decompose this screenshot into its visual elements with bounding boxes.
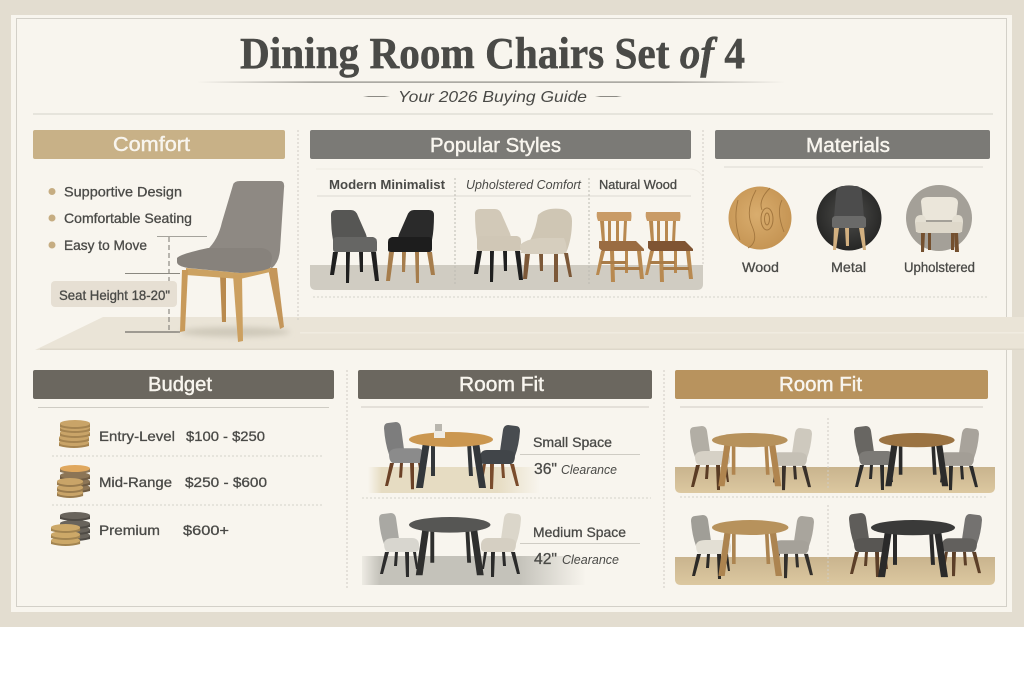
heading: room fit [675, 370, 988, 399]
panel: comfort [33, 130, 290, 342]
heading: room fit [358, 370, 652, 399]
budget row: premium: $600+ [183, 522, 229, 538]
panel: room fit clearance [358, 370, 652, 585]
small space scene [368, 422, 540, 493]
title: Dining Room Chairs Set of 4 [240, 29, 745, 78]
panel: popular styles [310, 130, 703, 290]
budget row: entry-level [59, 420, 265, 448]
heading: comfort: Comfort [113, 134, 190, 156]
scene: oak table with light chairs [690, 426, 812, 490]
budget row: mid-range [57, 465, 267, 498]
style: modern minimalist [329, 177, 446, 283]
title rule [197, 82, 785, 83]
style: upholstered comfort [466, 177, 582, 282]
panel: room fit options [675, 370, 995, 585]
medium space text: Medium Space [533, 524, 626, 540]
wood floor upper [675, 467, 995, 493]
seat height label [51, 281, 177, 307]
comfort list: Easy to Move [64, 237, 147, 253]
heading: budget [33, 370, 334, 399]
medium space text: 42" [534, 551, 557, 568]
scene: black table with dark chairs [849, 513, 982, 577]
budget row: entry-level: Entry-Level [99, 428, 175, 444]
medium space text [520, 524, 640, 568]
material: wood: Wood [742, 259, 779, 275]
style: natural wood [596, 177, 693, 282]
small space text: Clearance [561, 462, 617, 477]
material: metal [816, 186, 882, 275]
small space text [520, 434, 640, 478]
scene: walnut table with grey chairs [854, 426, 979, 490]
budget row: entry-level: $100 - $250 [186, 428, 265, 444]
material: upholstered [904, 185, 975, 275]
heading: room fit: Room Fit [459, 374, 544, 396]
heading: popular styles [310, 130, 691, 159]
comfort list [48, 184, 192, 253]
heading: budget: Budget [148, 374, 212, 396]
heading: materials: Materials [806, 135, 890, 157]
comfort list: Comfortable Seating [64, 210, 192, 226]
material: wood [728, 186, 792, 275]
large chair [177, 181, 290, 342]
heading: comfort [33, 130, 285, 159]
material: metal: Metal [831, 259, 866, 275]
small space text: 36" [534, 461, 557, 478]
panel: budget [33, 370, 334, 546]
scene: oak table with mixed chairs [691, 515, 814, 579]
heading: room fit: Room Fit [779, 374, 862, 396]
budget row: premium: Premium [99, 522, 160, 538]
budget row: mid-range: $250 - $600 [185, 474, 267, 490]
panel: materials [715, 130, 990, 275]
subtitle: Your 2026 Buying Guide [398, 89, 587, 106]
budget row: mid-range: Mid-Range [99, 474, 172, 490]
style: modern minimalist: Modern Minimalist [329, 177, 446, 192]
material: upholstered: Upholstered [904, 259, 975, 275]
comfort list: Supportive Design [64, 184, 182, 200]
style: upholstered comfort: Upholstered Comfort [466, 177, 582, 192]
seat height dimension lines [125, 236, 207, 332]
budget row: premium [51, 512, 229, 546]
floor band [35, 317, 1024, 350]
medium space scene [362, 513, 586, 585]
medium space text: Clearance [562, 552, 619, 567]
wood floor lower [675, 557, 995, 585]
style: natural wood: Natural Wood [599, 177, 677, 192]
seat height label: Seat Height 18-20" [59, 287, 170, 303]
heading: popular styles: Popular Styles [430, 135, 561, 157]
small space text: Small Space [533, 434, 612, 450]
heading: materials [715, 130, 990, 159]
style floor [310, 169, 703, 290]
